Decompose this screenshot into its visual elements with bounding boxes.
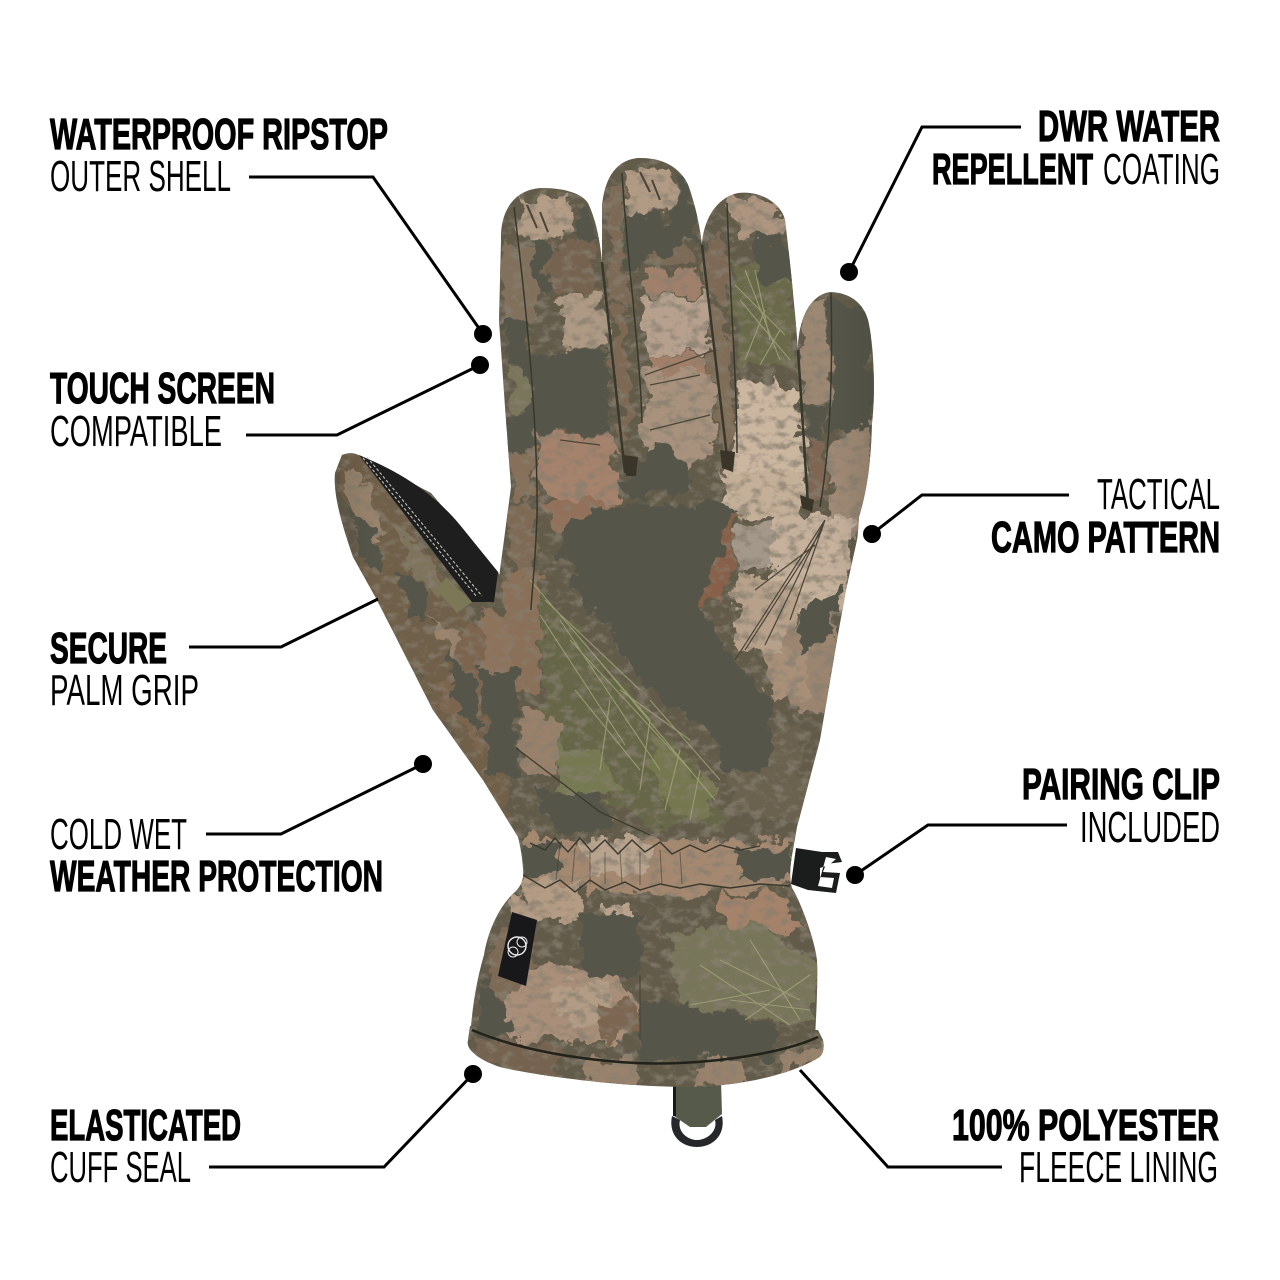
callout: secure palm grip	[50, 599, 378, 715]
camo fabric: thumb, hand, cuff, band	[320, 140, 890, 1100]
callout: cold wet weather protection	[50, 755, 432, 901]
pine needles	[530, 270, 810, 1025]
callout: touch screen	[50, 356, 489, 456]
callout: secure palm grip: SECURE	[50, 624, 167, 673]
glove illustration	[320, 140, 890, 1147]
finger tips and finger patches, tan layer	[440, 172, 874, 1090]
callout: cold wet weather protection: COLD WET	[50, 810, 187, 859]
callout: touch screen: TOUCH SCREEN	[50, 364, 275, 413]
callout: touch screen: COMPATIBLE	[50, 407, 222, 456]
D-ring pull tab	[671, 1080, 723, 1147]
callout: elasticated cuff seal: ELASTICATED	[50, 1101, 241, 1150]
callout: polyester fleece lining	[800, 1070, 1219, 1192]
callout: elasticated cuff seal	[50, 1065, 482, 1192]
finger seams and gaps	[472, 173, 832, 1063]
callout: waterproof ripstop: OUTER SHELL	[50, 152, 231, 201]
callout: DWR water repellent coating	[840, 102, 1220, 281]
callout: secure palm grip: PALM GRIP	[50, 666, 199, 715]
callout: cold wet weather protection: WEATHER PROTECTION	[50, 852, 383, 901]
callout: elasticated cuff seal: CUFF SEAL	[50, 1143, 191, 1192]
leaf veins and branches	[527, 172, 825, 1040]
black palm panel with stitching	[359, 455, 498, 613]
smooth olive fabric areas	[345, 170, 874, 1060]
callout: pairing clip included	[846, 760, 1220, 884]
callout: tactical camo pattern	[863, 470, 1220, 562]
thumb camo	[335, 455, 520, 830]
callout: DWR water repellent coating: REPELLENT	[932, 145, 1093, 194]
pairing clip hardware	[791, 848, 842, 893]
callout: waterproof ripstop	[50, 110, 492, 343]
callout: waterproof ripstop: WATERPROOF RIPSTOP	[50, 110, 388, 159]
brand label	[498, 912, 537, 986]
